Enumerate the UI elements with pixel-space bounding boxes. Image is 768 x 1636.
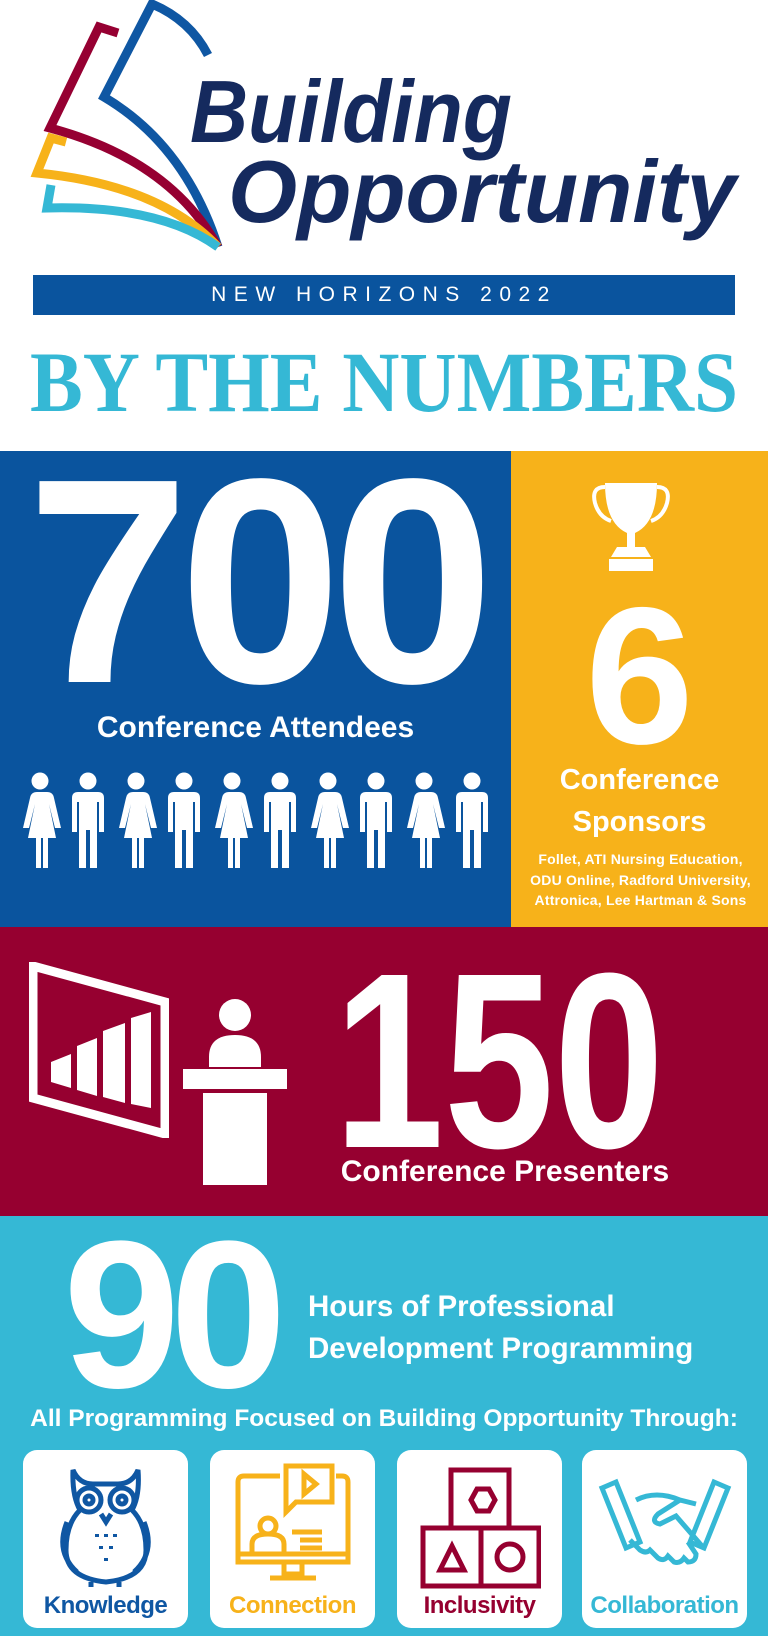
text: hours of professional development programming: [308, 1290, 693, 1365]
sponsor list: ODU Online, Radford University,: [530, 872, 751, 888]
icon: handshake: [598, 1478, 732, 1565]
panel: attendees: [0, 451, 511, 927]
number 700: 700: [27, 418, 484, 744]
logo text: Building: [190, 62, 512, 161]
icon: monitor with video: [236, 1464, 350, 1580]
icon: trophy: [592, 483, 670, 571]
card: connection: [210, 1450, 375, 1628]
logo: [30, 0, 740, 251]
icon: owl: [60, 1469, 151, 1587]
number 90: 90: [63, 1197, 277, 1432]
label: knowledge: Knowledge: [44, 1592, 167, 1619]
icon: podium speaker: [183, 999, 287, 1185]
icon: chart screen: [29, 962, 169, 1138]
panel: programming hours: [0, 1216, 768, 1636]
label: conference sponsors: Sponsors: [573, 806, 706, 838]
label: connection: Connection: [229, 1592, 356, 1619]
sponsor list: Attronica, Lee Hartman & Sons: [535, 892, 746, 908]
number 6: 6: [585, 567, 694, 785]
card: inclusivity: [397, 1450, 562, 1628]
banner: New Horizons 2022: NEW HORIZONS 2022: [211, 283, 557, 306]
label: conference presenters: Conference Presenters: [341, 1155, 669, 1188]
logo mark: book pages: [37, 4, 218, 247]
icon: people row: [23, 772, 488, 868]
text: hours of professional development programming: Hours of Professional: [308, 1290, 615, 1323]
card: knowledge: [23, 1450, 188, 1628]
icon: blocks: [420, 1468, 541, 1588]
label: conference sponsors: [560, 764, 719, 838]
text: hours of professional development programming: Development Programming: [308, 1332, 693, 1365]
text: all programming focused: All Programming Focused on Building Opportunity Through:: [30, 1405, 738, 1432]
panel: sponsors: [511, 451, 768, 927]
banner: New Horizons 2022: [33, 275, 735, 315]
card: collaboration: [582, 1450, 747, 1628]
sponsor list: [530, 851, 751, 908]
label: conference sponsors: Conference: [560, 764, 719, 796]
label: collaboration: Collaboration: [590, 1592, 739, 1619]
panel: presenters: [0, 927, 768, 1216]
logo: Opportunity: [228, 142, 740, 241]
sponsor list: Follet, ATI Nursing Education,: [538, 851, 743, 867]
label: inclusivity: Inclusivity: [424, 1592, 535, 1619]
label: conference attendees: Conference Attendees: [97, 711, 414, 744]
